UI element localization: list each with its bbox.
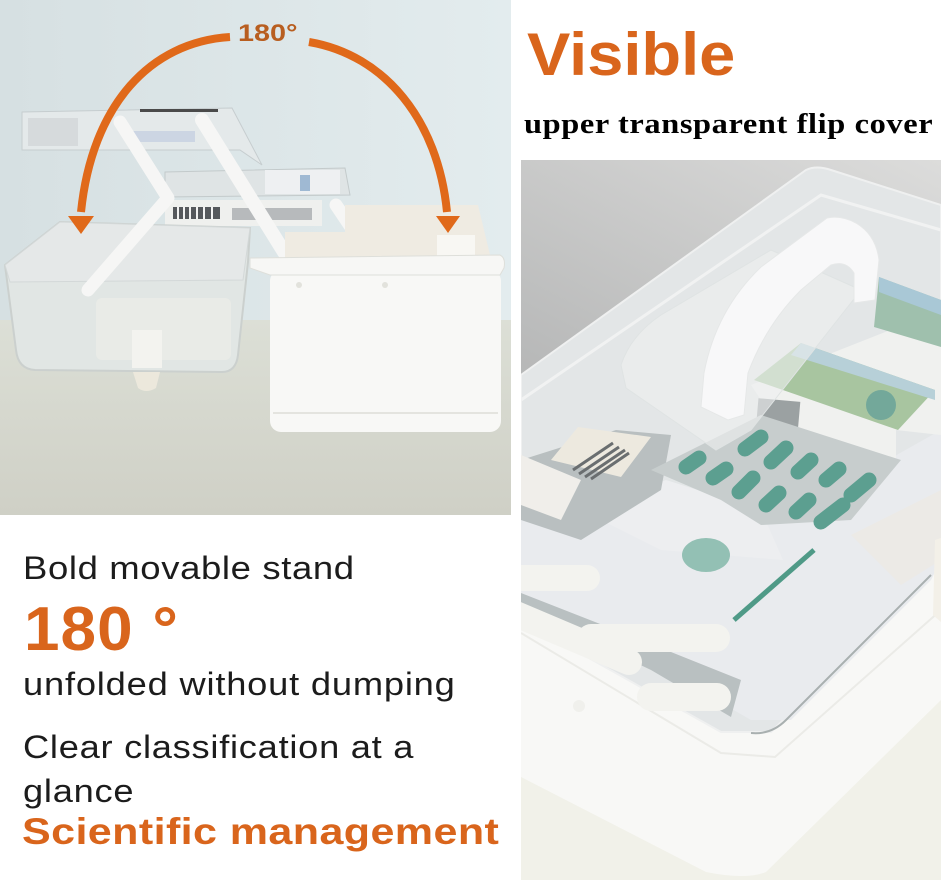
transparent left box xyxy=(5,222,250,391)
arrow: 180 degree arc xyxy=(68,37,460,234)
label: 180 degrees: 180° xyxy=(238,20,298,47)
text: Bold movable stand: Bold movable stand xyxy=(23,550,355,586)
white stand arms xyxy=(88,120,369,290)
heading: Visible: Visible xyxy=(527,21,735,88)
transparent lid xyxy=(521,168,941,732)
product label strip xyxy=(165,200,322,226)
handle recess xyxy=(621,250,861,450)
medicine: boxes with landscape print xyxy=(751,277,941,460)
subheading: upper transparent flip cover: upper transparent flip cover xyxy=(524,108,933,140)
photo: closed box with transparent lid xyxy=(521,160,941,880)
white right box xyxy=(250,205,504,432)
number: 180 degrees: 180 ° xyxy=(24,595,179,664)
photo: open box unfolded 180 degrees xyxy=(0,0,511,515)
medicine: barcode package xyxy=(521,427,671,540)
medicine: green capsule blister xyxy=(651,415,901,525)
medicine: leaf print xyxy=(581,480,783,572)
glass corner and lavender inside xyxy=(521,430,941,733)
side handle stub xyxy=(933,538,941,622)
text: Clear classification: Clear classification at a glance xyxy=(23,729,414,809)
white stand arms xyxy=(511,578,717,697)
white box base xyxy=(521,540,941,876)
text: unfolded without dumping: unfolded without dumping xyxy=(23,666,456,702)
upper tray xyxy=(22,108,350,197)
white handle xyxy=(701,217,879,420)
text: Scientific management: Scientific management xyxy=(22,811,499,852)
